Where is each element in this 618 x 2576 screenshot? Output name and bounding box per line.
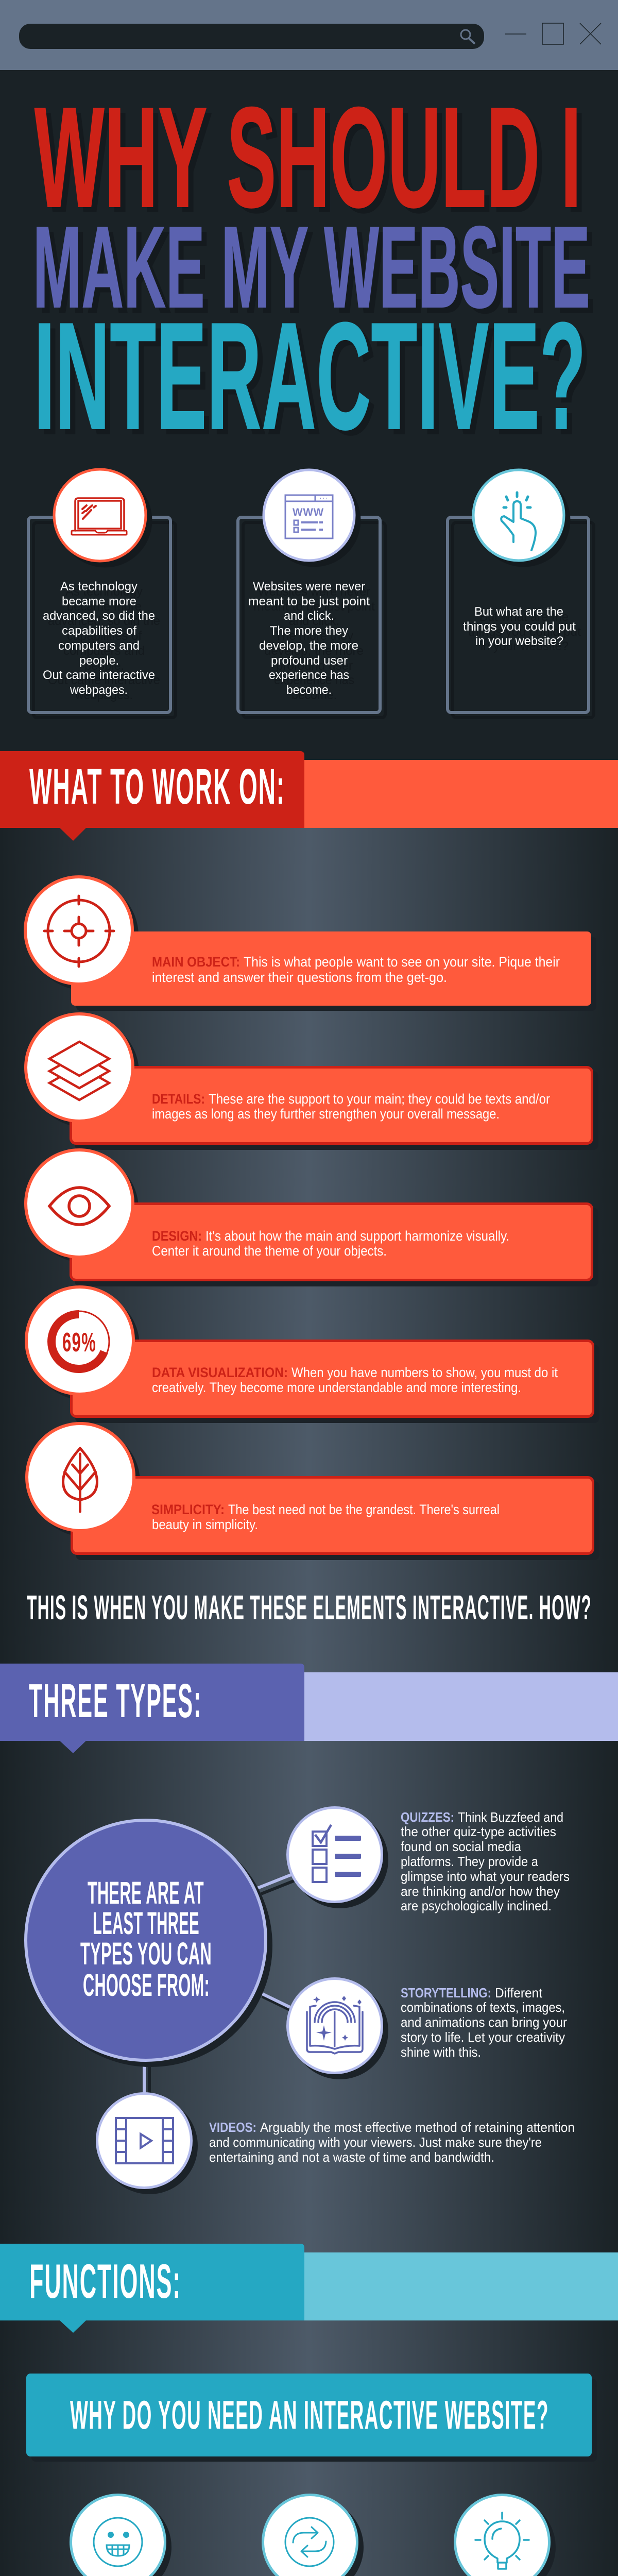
item: design: [26, 1150, 598, 1286]
banner: why do you need: [26, 2374, 592, 2456]
card: main object: MAIN OBJECT:: [152, 954, 240, 970]
item: simplicity: [27, 1423, 599, 1560]
card: details: images as long as they further strengthen your overall message.: [152, 1106, 500, 1122]
text: storytelling: shine with this.: [401, 2044, 481, 2060]
section header: functions: FUNCTIONS:: [29, 2254, 181, 2308]
panel: technology: computers and: [58, 639, 140, 653]
panel: technology: [28, 469, 170, 713]
item: data visualization: [26, 1287, 599, 1423]
section header: what to work on: WHAT TO WORK ON:: [29, 758, 285, 815]
text: videos: VIDEOS:: [209, 2120, 256, 2135]
panel: websites: The more they: [270, 624, 348, 638]
panel: websites: meant to be just point: [248, 595, 370, 608]
text: quizzes: found on social media: [401, 1839, 521, 1854]
panel: websites: become.: [286, 683, 332, 697]
title: [33, 77, 590, 461]
icon: web page: WWW: [293, 506, 324, 518]
card: details: These are the support to your main; they could be texts and/or: [209, 1091, 550, 1107]
text: storytelling: story to life. Let your creativity: [401, 2029, 565, 2045]
section header: three types: THREE TYPES:: [29, 1674, 202, 1727]
panel: websites: and click.: [284, 609, 334, 623]
search field: [19, 24, 484, 49]
text: videos: entertaining and not a waste of time and bandwidth.: [209, 2149, 494, 2165]
card: details: [71, 1067, 598, 1150]
icon: checklist: [287, 1807, 382, 1902]
icon: tapping hand: [473, 470, 564, 561]
section header: what to work on: [0, 751, 618, 841]
panel: question: things you could put: [463, 620, 576, 634]
card: data visualization: When you have numbers to show, you must do it: [291, 1365, 558, 1380]
text: storytelling: Different: [495, 1985, 543, 2001]
card: simplicity: SIMPLICITY:: [151, 1502, 225, 1517]
panel: technology: capabilities of: [62, 624, 136, 638]
function: brand: [435, 2495, 562, 2576]
panel: websites: develop, the more: [259, 639, 358, 653]
type: storytelling: [287, 1978, 567, 2073]
type: quizzes: [287, 1807, 570, 1913]
icon: laptop: [54, 469, 146, 561]
card: details: DETAILS:: [152, 1091, 205, 1107]
section header: three types: [0, 1664, 618, 1753]
card: simplicity: beauty in simplicity.: [152, 1517, 258, 1532]
text: quizzes: are thinking and/or how they: [401, 1884, 560, 1899]
card: data visualization: DATA VISUALIZATION:: [152, 1365, 288, 1380]
text: quizzes: QUIZZES:: [401, 1809, 454, 1825]
panel: websites: profound user: [271, 654, 348, 668]
card: design: [71, 1204, 598, 1286]
icon: sync arrows: [263, 2495, 357, 2576]
card: design: It's about how the main and support harmonize visually.: [205, 1228, 509, 1244]
panel: websites: experience has: [269, 668, 349, 682]
card: main object: interest and answer their questions from the get-go.: [152, 970, 447, 985]
browser bar: [0, 0, 618, 70]
icon: 69 percent ring: [26, 1287, 133, 1394]
card: main object: This is what people want to see on your site. Pique their: [244, 954, 560, 970]
text: storytelling: STORYTELLING:: [401, 1985, 491, 2001]
icon: web page: [264, 470, 354, 561]
main circle: three types: [26, 1820, 266, 2060]
card: data visualization: [71, 1341, 599, 1423]
text: quizzes: Think Buzzfeed and: [458, 1809, 563, 1825]
panel: technology: people.: [79, 654, 119, 668]
panel: technology: As technology: [60, 580, 138, 594]
function: engage: [243, 2495, 375, 2576]
card: simplicity: [72, 1478, 599, 1560]
text: quizzes: the other quiz-type activities: [401, 1824, 556, 1839]
text: storytelling: and animations can bring your: [401, 2014, 567, 2030]
icon: target: [25, 877, 132, 984]
text: storytelling: [401, 1985, 567, 2060]
panel: question: in your website?: [475, 634, 563, 648]
card: design: Center it around the theme of your objects.: [152, 1243, 387, 1259]
card: simplicity: The best need not be the grandest. There's surreal: [228, 1502, 500, 1517]
text: quizzes: glimpse into what your readers: [401, 1869, 570, 1884]
icon: story book: [287, 1978, 382, 2073]
icon: film strip: [97, 2094, 192, 2188]
icon: 69 percent ring: 69%: [62, 1328, 96, 1358]
section header: functions: [0, 2244, 618, 2333]
connector lines: [144, 1875, 291, 2093]
panel: technology: became more: [62, 595, 136, 608]
icon: grin face: [71, 2495, 165, 2576]
text: quizzes: platforms. They provide a: [401, 1854, 538, 1869]
icon: layers: [26, 1014, 133, 1121]
item: details: [26, 1014, 598, 1150]
main circle: three types: CHOOSE FROM:: [83, 1968, 210, 2003]
panel: technology: advanced, so did the: [43, 609, 155, 623]
icon: light bulb: [455, 2495, 549, 2576]
icon: leaf: [27, 1423, 134, 1531]
panel: websites: [238, 470, 380, 713]
panel: technology: Out came interactive: [43, 668, 155, 682]
text: storytelling: combinations of texts, images,: [401, 1999, 565, 2015]
card: main object: [71, 931, 596, 1011]
window controls: [505, 23, 601, 44]
text: quizzes: [401, 1809, 570, 1913]
panel: question: But what are the: [474, 605, 563, 619]
main circle: three types: LEAST THREE: [93, 1906, 199, 1941]
main circle: three types: THERE ARE AT: [88, 1875, 204, 1910]
item: main object: [25, 877, 596, 1011]
panel: technology: webpages.: [70, 683, 128, 697]
text: videos: Arguably the most effective method of retaining attention: [260, 2120, 575, 2135]
panel: question: [448, 470, 589, 713]
main circle: three types: TYPES YOU CAN: [80, 1936, 212, 1971]
card: data visualization: creatively. They become more understandable and more interesting.: [152, 1380, 521, 1395]
icon: eye: [26, 1150, 133, 1257]
card: design: DESIGN:: [152, 1228, 202, 1244]
text: videos: [209, 2120, 575, 2165]
text: videos: and communicating with your viewers. Just make sure they're: [209, 2134, 542, 2150]
function: entertain: [57, 2495, 185, 2576]
icon: magnifier: [461, 30, 475, 44]
panel: websites: Websites were never: [253, 580, 365, 594]
type: videos: [97, 2094, 575, 2188]
text: quizzes: are psychologically inclined.: [401, 1898, 552, 1913]
